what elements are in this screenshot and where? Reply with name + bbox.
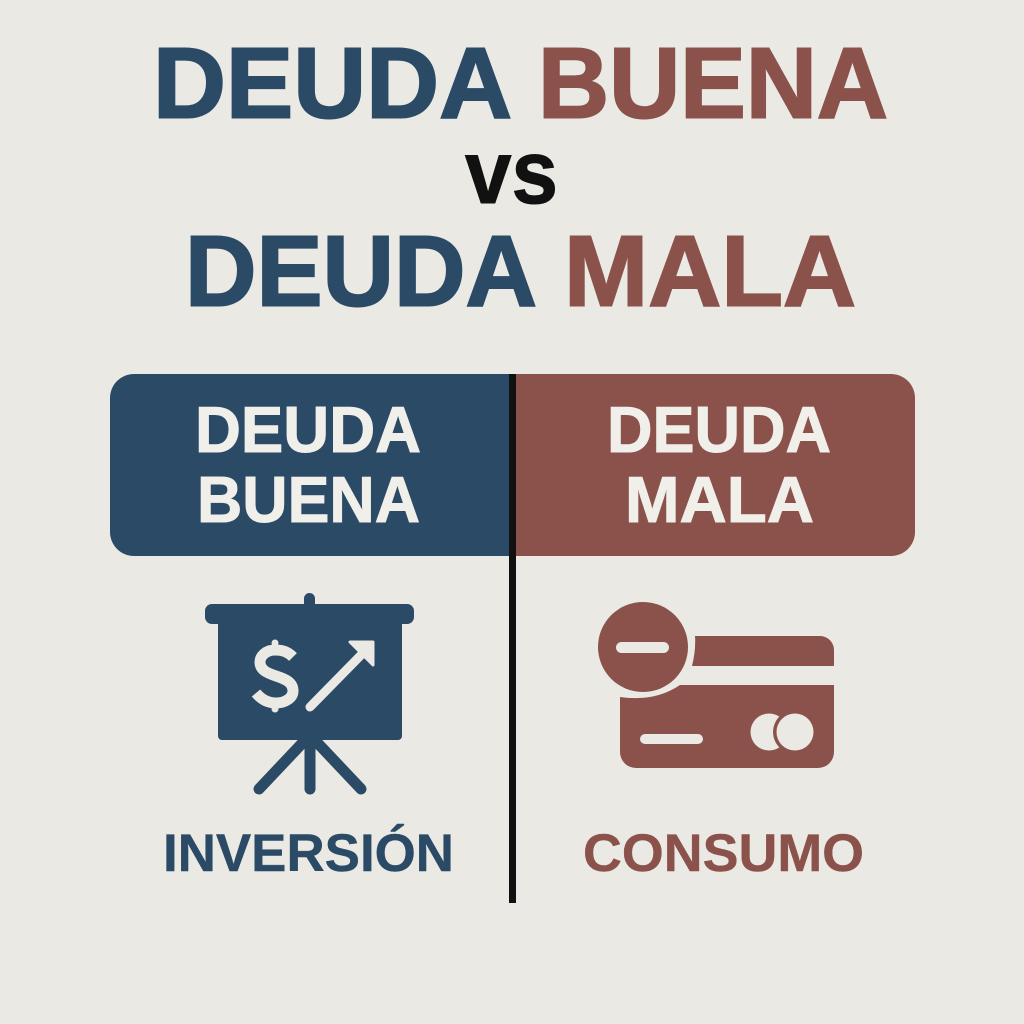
title line: deuda mala: MALA — [564, 216, 856, 328]
title line: deuda mala — [185, 216, 856, 328]
label: inversion: INVERSIÓN — [163, 823, 454, 883]
panel: deuda mala header — [512, 374, 915, 556]
title connector: vs: vs — [465, 123, 558, 223]
title line: deuda buena: DEUDA — [153, 28, 512, 140]
panel: deuda buena header: BUENA — [197, 463, 420, 536]
panel: deuda buena header — [110, 374, 512, 556]
panel: deuda buena header: DEUDA — [195, 393, 421, 466]
title line: deuda buena — [153, 28, 888, 140]
center divider — [509, 374, 516, 903]
icon: investment presentation board — [205, 593, 414, 789]
icon: credit card with minus — [598, 602, 834, 768]
panel: deuda mala header: MALA — [625, 463, 814, 536]
panel: deuda mala header: DEUDA — [607, 393, 831, 466]
label: consumo: CONSUMO — [583, 824, 864, 883]
title line: deuda mala: DEUDA — [185, 216, 537, 328]
title — [153, 28, 888, 328]
title line: deuda buena: BUENA — [538, 28, 888, 140]
